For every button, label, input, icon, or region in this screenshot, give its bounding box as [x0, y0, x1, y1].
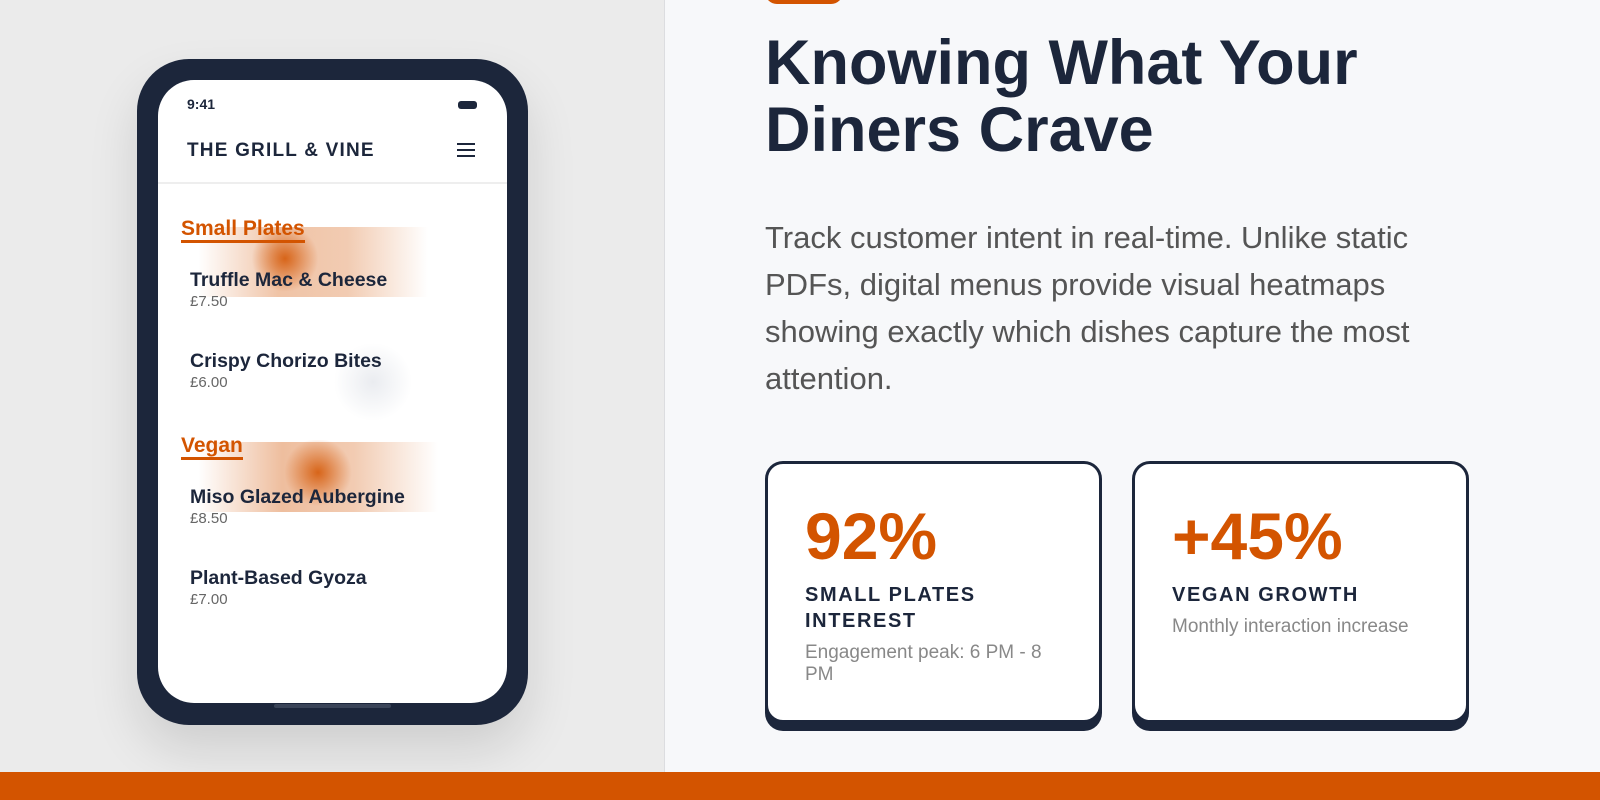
menu item: chorizo: [190, 350, 382, 391]
description: Track customer intent in real-time. Unlike static PDFs, digital menus provide visual heatmaps showing exactly which dishes capture the most attention.: [765, 220, 1409, 396]
restaurant name: THE GRILL & VINE: [187, 140, 375, 161]
title: Knowing What Your: [765, 28, 1358, 98]
stat card: vegan: [1132, 461, 1469, 723]
menu item: gyoza: [190, 567, 367, 608]
menu item: truffle: [190, 269, 387, 310]
stat card: small plates: 92%: [805, 499, 937, 573]
battery icon: [458, 101, 477, 109]
stat card: vegan: Monthly interaction increase: [1172, 616, 1409, 637]
menu item: truffle: Truffle Mac & Cheese: [190, 269, 387, 291]
stat card: small plates: Engagement peak: 6 PM - 8 PM: [805, 642, 1042, 685]
stat card: small plates: [765, 461, 1102, 723]
category: small plates: Small Plates: [181, 217, 305, 240]
menu item: miso: [190, 486, 405, 527]
left panel: [0, 0, 665, 772]
heatmap: small plates: [198, 227, 428, 297]
category: vegan: Vegan: [181, 434, 243, 457]
menu item: truffle: £7.50: [190, 293, 228, 310]
stat card: vegan: VEGAN GROWTH: [1172, 584, 1359, 606]
heatmap: chorizo: [328, 342, 418, 422]
menu item: miso: Miso Glazed Aubergine: [190, 486, 405, 508]
menu item: gyoza: £7.00: [190, 591, 228, 608]
heatmap: vegan: [198, 442, 438, 512]
badge: [765, 0, 843, 4]
menu item: miso: £8.50: [190, 510, 228, 527]
home indicator: [274, 704, 391, 708]
status time: 9:41: [187, 96, 215, 112]
menu item: chorizo: Crispy Chorizo Bites: [190, 350, 382, 372]
stat card: vegan: +45%: [1172, 499, 1343, 573]
phone screen: [158, 80, 507, 703]
phone mockup: [137, 59, 528, 725]
title: Diners Crave: [765, 95, 1154, 165]
menu item: gyoza: Plant-Based Gyoza: [190, 567, 367, 589]
title: [765, 28, 1358, 165]
icon: hamburger menu: [457, 143, 475, 157]
menu item: chorizo: £6.00: [190, 374, 228, 391]
bottom bar: [0, 772, 1600, 800]
stat card: small plates: SMALL PLATES INTEREST: [805, 584, 976, 632]
